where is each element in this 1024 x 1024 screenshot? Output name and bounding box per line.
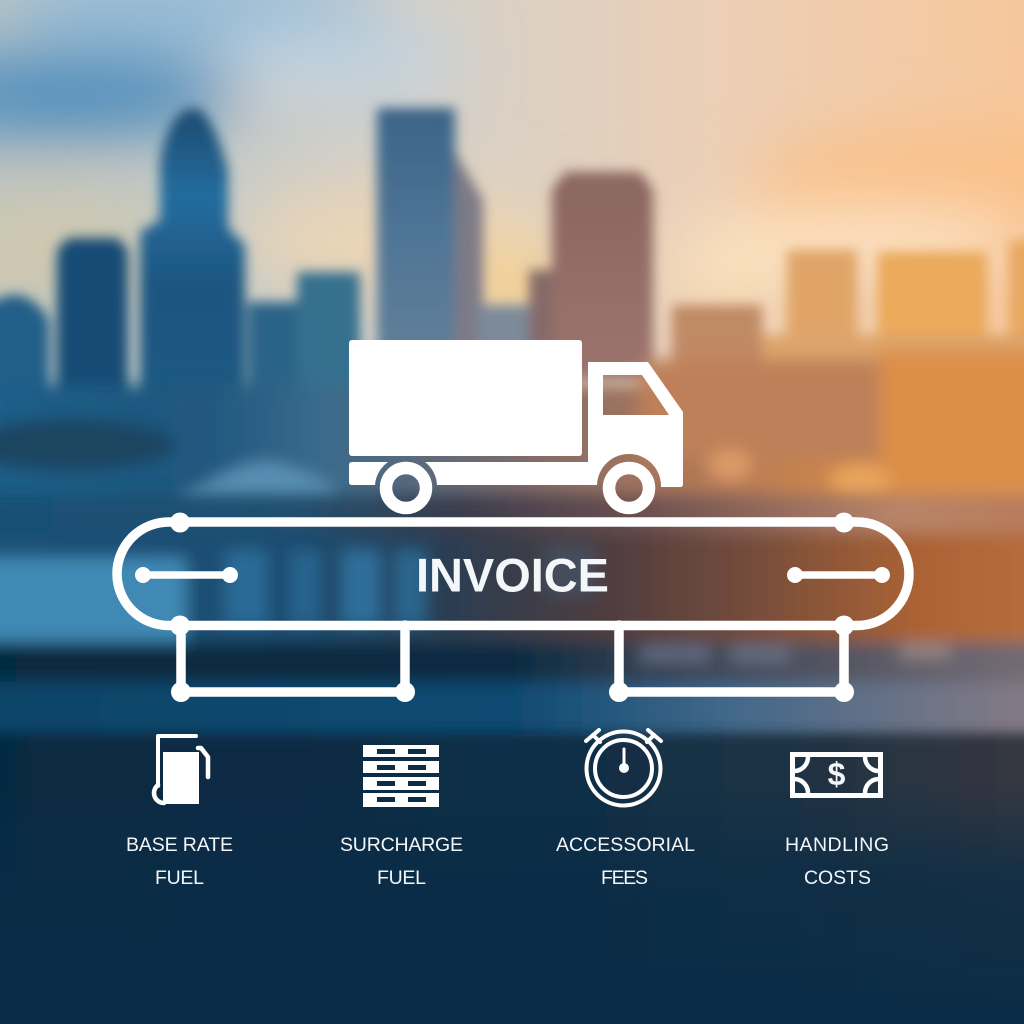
belt outline xyxy=(117,522,909,626)
label: accessorial fees: FEES xyxy=(601,867,648,889)
right support bracket xyxy=(609,625,854,702)
label: base rate fuel xyxy=(126,834,233,889)
icon: fuel pump xyxy=(154,736,208,804)
label: handling costs xyxy=(785,834,889,889)
front wheel xyxy=(609,468,649,508)
label: handling costs: HANDLING xyxy=(785,834,889,856)
invoice label: INVOICE xyxy=(416,548,609,602)
truck cab and chassis xyxy=(425,362,683,487)
conveyor belt xyxy=(117,512,909,702)
icon: stacked pallets xyxy=(363,745,439,807)
label: surcharge fuel: SURCHARGE xyxy=(340,834,463,856)
right roller xyxy=(787,567,890,583)
label: surcharge fuel xyxy=(340,834,463,889)
label: accessorial fees: ACCESSORIAL xyxy=(556,834,695,856)
icon: stopwatch xyxy=(586,730,661,806)
label: handling costs: COSTS xyxy=(804,867,871,889)
rear wheel xyxy=(386,468,426,508)
truck rear bumper xyxy=(349,462,388,485)
icon: banknote xyxy=(792,754,880,796)
belt joints xyxy=(170,512,854,636)
label: surcharge fuel: FUEL xyxy=(377,867,426,889)
truck cargo box xyxy=(349,340,582,456)
label: accessorial fees xyxy=(556,834,695,889)
truck icon xyxy=(349,340,683,508)
label: base rate fuel: FUEL xyxy=(155,867,204,889)
left roller xyxy=(135,567,238,583)
left support bracket xyxy=(171,625,415,702)
label: base rate fuel: BASE RATE xyxy=(126,834,233,856)
icon: banknote: $ xyxy=(828,756,846,792)
